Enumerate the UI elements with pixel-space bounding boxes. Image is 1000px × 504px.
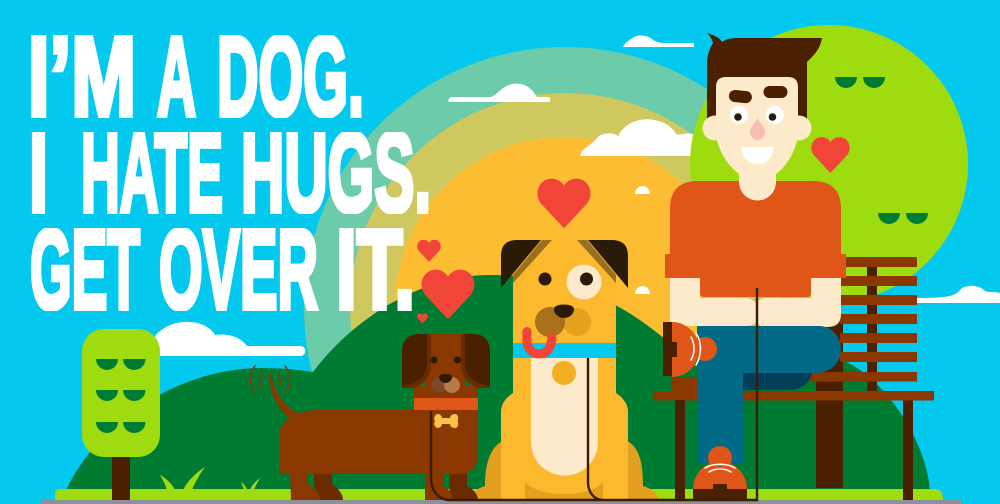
line 3: OVER (159, 206, 318, 332)
dog face (430, 356, 461, 393)
eyes (538, 264, 602, 300)
headline (30, 35, 428, 311)
collar (513, 343, 616, 358)
standing shoe (693, 446, 747, 500)
body and head (501, 240, 628, 500)
heart: small dog big (421, 270, 475, 319)
green hills (66, 275, 930, 490)
raised shoe (663, 322, 717, 377)
line 1: I’M (28, 14, 136, 140)
line 1: DOG. (217, 14, 364, 140)
tongue (527, 332, 552, 354)
hair (707, 33, 822, 122)
head (425, 334, 466, 392)
large round tree (690, 25, 968, 303)
line 2: HUGS. (241, 110, 431, 236)
hearts (417, 137, 850, 323)
muzzle (535, 304, 591, 337)
tail wag marks (250, 366, 290, 392)
seat over hidden thigh underside (743, 391, 934, 400)
tail (270, 374, 300, 420)
grass tufts (160, 467, 260, 490)
ears (501, 240, 628, 288)
heart: small dog small (417, 240, 441, 262)
heart: beside man (811, 137, 850, 173)
road (42, 500, 962, 504)
ground strip (55, 489, 943, 500)
ears (702, 116, 812, 140)
bench (654, 257, 934, 500)
big dog (470, 240, 660, 500)
shirt (665, 181, 846, 297)
body (279, 386, 478, 474)
trousers (697, 326, 841, 464)
rear haunches (470, 440, 660, 500)
arms (670, 278, 841, 327)
small dog (250, 334, 490, 500)
face (716, 77, 798, 200)
bone tag (434, 414, 458, 428)
line 2 (32, 132, 428, 214)
ear shading (402, 334, 490, 388)
clouds (155, 36, 1000, 356)
line 3 (30, 228, 412, 311)
collar (414, 398, 478, 410)
heart: above big dog (537, 179, 591, 228)
chest (531, 358, 598, 476)
small tree (82, 329, 160, 500)
leash (431, 288, 757, 500)
line 3: GET (30, 206, 140, 332)
line 1 (31, 35, 362, 118)
near legs (290, 470, 453, 500)
rainbow arcs (304, 47, 826, 500)
belly shade (525, 482, 603, 500)
line 3: IT. (336, 206, 415, 332)
line 1: A (157, 14, 196, 140)
line 2: HATE (81, 110, 223, 236)
far legs (314, 470, 478, 500)
heart: small dog tiny (417, 313, 428, 323)
line 2: I (29, 110, 48, 236)
man (663, 33, 934, 500)
dog ears (402, 334, 490, 386)
